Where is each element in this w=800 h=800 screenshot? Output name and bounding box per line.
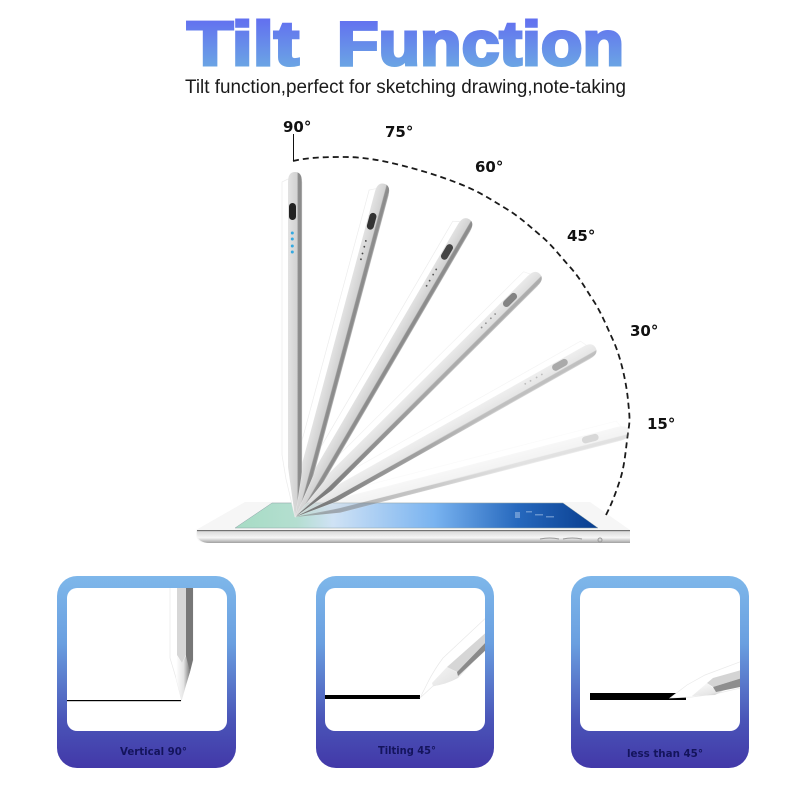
panel: tilting 45 (316, 576, 494, 768)
subtitle: Tilt function,perfect for sketching drawing,note-taking (185, 77, 626, 98)
angle labels: 30° (630, 322, 658, 340)
pen at 30 degrees (289, 336, 599, 523)
line stroke thick (590, 693, 686, 700)
angle labels (283, 118, 675, 433)
angle labels: 90° (283, 118, 311, 136)
screen icons (515, 511, 554, 518)
angle labels: 75° (385, 123, 413, 141)
pen close-up low angle (670, 660, 745, 698)
title: Tilt (187, 10, 299, 79)
caption: Vertical 90° (120, 745, 187, 758)
title: Function (337, 10, 624, 79)
angle labels: 15° (647, 415, 675, 433)
caption: less than 45° (627, 747, 703, 760)
pen at 90 degrees (282, 172, 302, 517)
pen at 45 degrees (286, 265, 545, 522)
tablet screen (235, 503, 598, 528)
tablet body edge (197, 530, 630, 543)
pen at 15 degrees (292, 419, 631, 524)
panel: less than 45 (571, 576, 749, 768)
line stroke thin (67, 700, 181, 701)
90 degree marker line (292, 134, 294, 161)
angle labels: 60° (475, 158, 503, 176)
tablet (196, 502, 630, 543)
panel: vertical 90 (57, 576, 236, 768)
pen close-up tilted (420, 618, 485, 698)
line stroke medium (325, 695, 420, 699)
pen close-up vertical (170, 580, 193, 700)
pen at 75 degrees (282, 180, 391, 519)
dashed arc (293, 157, 630, 515)
caption: Tilting 45° (378, 744, 436, 757)
title (187, 10, 624, 79)
angle labels: 45° (567, 227, 595, 245)
pen at 60 degrees (284, 213, 475, 521)
tablet buttons (540, 538, 602, 542)
